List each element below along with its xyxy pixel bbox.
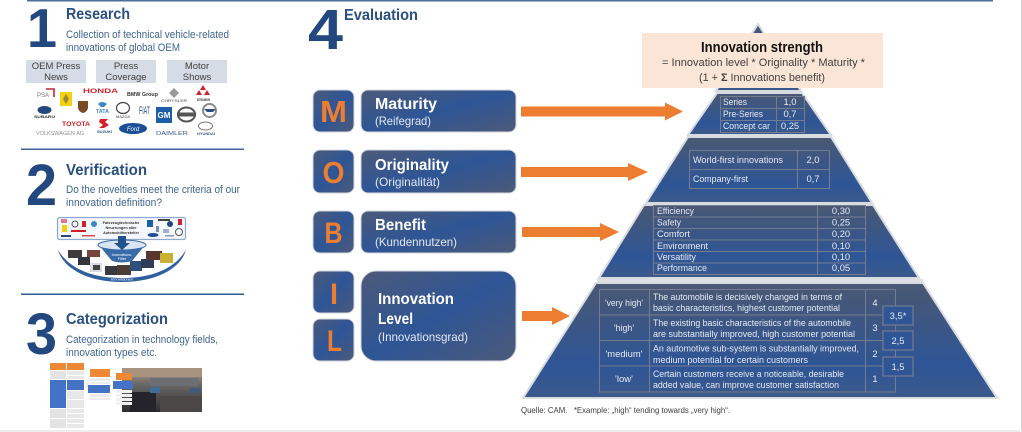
pyramid layer: benefit [599,205,919,278]
panel: step 1 research [26,0,229,137]
score box 2,5 [883,331,913,350]
benefit table: Environment [657,240,708,251]
pyramid layer: originality [646,137,872,203]
arrow: maturity to pyramid [521,102,683,120]
benefit table: 0,30 [832,205,850,216]
innovation level row [313,271,516,361]
benefit table: Comfort [657,228,690,239]
source note: Quelle: CAM. *Example: „high“ tending towards „very high“. [521,406,730,415]
source tag: motor shows: Motor [185,61,209,72]
maturity table [720,96,804,132]
innovation level table: An automotive sub-system is substantially improved, [653,342,859,354]
verification description: Do the novelties meet the criteria of our [66,184,240,196]
arrow: innovation level to pyramid [522,307,570,325]
carmaker logos: MAZDA [116,115,131,119]
innovation filter diagram: Innovations- [112,253,133,257]
carmaker logos: CHRYSLER [161,99,188,103]
label: originality: Originality [375,157,449,174]
heading: research: Research [66,6,130,23]
callout: innovation strength formula: = Innovation level * Originality * Maturity * [662,57,866,69]
source tag: press coverage [96,60,156,83]
innovation filter diagram [58,218,186,282]
benefit table: 0,05 [832,262,850,273]
innovation level table: medium potential for certain customers [653,354,808,365]
innovation level table: 'low' [615,373,633,384]
carmaker logos: BMW Group [127,92,158,98]
verification description: innovation definition? [66,197,162,209]
label: originality: (Originalität) [375,175,440,189]
originality table: 0,7 [806,173,820,184]
heading: categorization: Categorization [66,311,168,328]
score box 1,5 [883,357,913,376]
innovation level table: 1 [872,373,878,384]
innovation level table: 3 [872,322,878,333]
innovation level table: 'medium' [606,348,643,359]
callout: innovation strength formula [642,33,883,88]
carmaker logos: MITSUBISHI [197,98,210,102]
score box 1,5: 1,5 [891,361,905,372]
innovation level table: 4 [872,297,878,308]
carmaker logos: HYUNDAI [197,132,215,136]
benefit table: Safety [657,216,681,228]
carmaker logos: Ford [127,127,140,133]
maturity table: Series [723,96,747,107]
innovation filter diagram: Innovationen [111,278,133,282]
innovation level table: 2 [872,348,878,359]
source tag: motor shows [167,60,227,83]
label: maturity: Maturity [375,96,437,113]
score box 3,5 [883,306,913,325]
source tag: press coverage: Press [114,61,138,72]
label: innovation level: Level [378,311,413,328]
originality row [313,150,516,193]
benefit table: 0,20 [832,228,850,239]
innovation level table: 'high' [614,322,634,333]
originality table [690,150,830,188]
label: benefit: (Kundennutzen) [375,235,457,249]
letter tile B [313,211,354,253]
benefit table: 0,25 [832,216,850,228]
innovation level table: are substantially improved, high customer potential [653,328,855,339]
innovation level table: The existing basic characteristics of the automobile [653,317,851,328]
originality table: World-first innovations [693,154,783,165]
source tag: OEM press news [26,60,86,83]
label: innovation level: Innovation [378,291,454,308]
letter tile L: L [327,325,342,358]
innovation strength pyramid [523,24,997,398]
letter tile I: I [330,278,338,311]
pyramid layer: innovation level [523,283,997,398]
source tag: press coverage: Coverage [105,72,147,83]
categorization description: innovation types etc. [66,347,157,359]
letter tile O [313,150,354,193]
score box 3,5: 3,5* [890,310,907,321]
maturity table: Concept car [723,120,770,131]
letter tile L [313,319,354,361]
label: benefit [361,211,516,253]
maturity row [313,90,516,132]
innovation filter diagram: Neuerungen aller [105,226,137,230]
carmaker logos: FIAT [139,105,150,117]
letter tile O: O [322,155,344,190]
label: maturity: (Reifegrad) [375,114,431,128]
innovation filter diagram: Filter [118,257,127,261]
innovation filter diagram: Fahrzeugtechnische [103,221,139,225]
source tag: OEM press news: News [44,72,68,83]
carmaker logos: HONDA [83,88,118,95]
source tag: motor shows: Shows [183,72,212,83]
carmaker logos: TATA [96,109,109,115]
innovation level table [600,290,896,392]
label: originality [361,150,516,193]
benefit table: 0,10 [832,251,850,262]
pyramid apex [716,24,801,91]
letter tile M [313,90,354,132]
carmaker logos: DAIMLER [156,131,188,137]
heading: verification: Verification [66,162,147,179]
benefit table [654,205,866,274]
label: benefit: Benefit [375,217,427,234]
innovation level table: Certain customers receive a noticeable, desirable [653,368,844,379]
letter tile B: B [324,217,342,250]
maturity table: 0,25 [781,120,799,131]
categorization description: Categorization in technology fields, [66,334,218,346]
letter tile M: M [320,94,347,129]
panel: step 4 evaluation [308,0,997,415]
innovation level table: The automobile is decisively changed in terms of [653,291,842,302]
benefit table: 0,10 [832,240,850,251]
benefit table: Performance [657,262,707,273]
carmaker logos: GM [158,111,171,120]
categorization tree with cockpit photo [50,363,202,428]
carmaker logos: TOYOTA [62,121,90,128]
originality table: 2,0 [806,154,820,165]
label: maturity [361,90,516,132]
carmaker logos [34,85,216,137]
research description: innovations of global OEM [66,42,180,54]
callout: innovation strength formula: Innovation strength [701,40,823,56]
pyramid layer: maturity [688,93,831,135]
carmaker logos: VOLKSWAGEN AG [36,131,84,137]
step number 2: 2 [26,153,57,218]
benefit row [313,211,516,253]
maturity table: 1,0 [783,96,797,107]
benefit table: Versatility [657,251,696,262]
heading: evaluation: Evaluation [344,7,418,24]
innovation level table: 'very high' [605,297,643,308]
panel: step 3 categorization [26,302,218,428]
maturity table: 0,7 [783,108,797,119]
benefit table: Efficiency [657,205,694,216]
originality table: Company-first [693,173,748,184]
research description: Collection of technical vehicle-related [66,29,229,41]
score box 2,5: 2,5 [891,335,905,346]
innovation level table: added value, can improve customer satisfaction [653,379,839,390]
maturity table: Pre-Series [723,108,763,119]
innovation level table: basic characteristics, highest customer potential [653,302,840,313]
carmaker logos: SUBARU [34,114,55,119]
arrow: originality to pyramid [521,163,648,181]
arrow: benefit to pyramid [522,223,619,241]
innovation filter diagram: Automobilhersteller [103,231,139,235]
carmaker logos: PSA [37,93,49,99]
step number 3: 3 [26,302,57,367]
callout: innovation strength formula: (1 + Σ Innovations benefit) [699,72,825,84]
carmaker logos: SUZUKI [97,130,112,134]
label: innovation level: (Innovationsgrad) [378,330,468,344]
label: innovation level [361,271,516,361]
panel: step 2 verification [26,153,240,282]
letter tile I [313,271,354,313]
source tag: OEM press news: OEM Press [32,61,81,72]
